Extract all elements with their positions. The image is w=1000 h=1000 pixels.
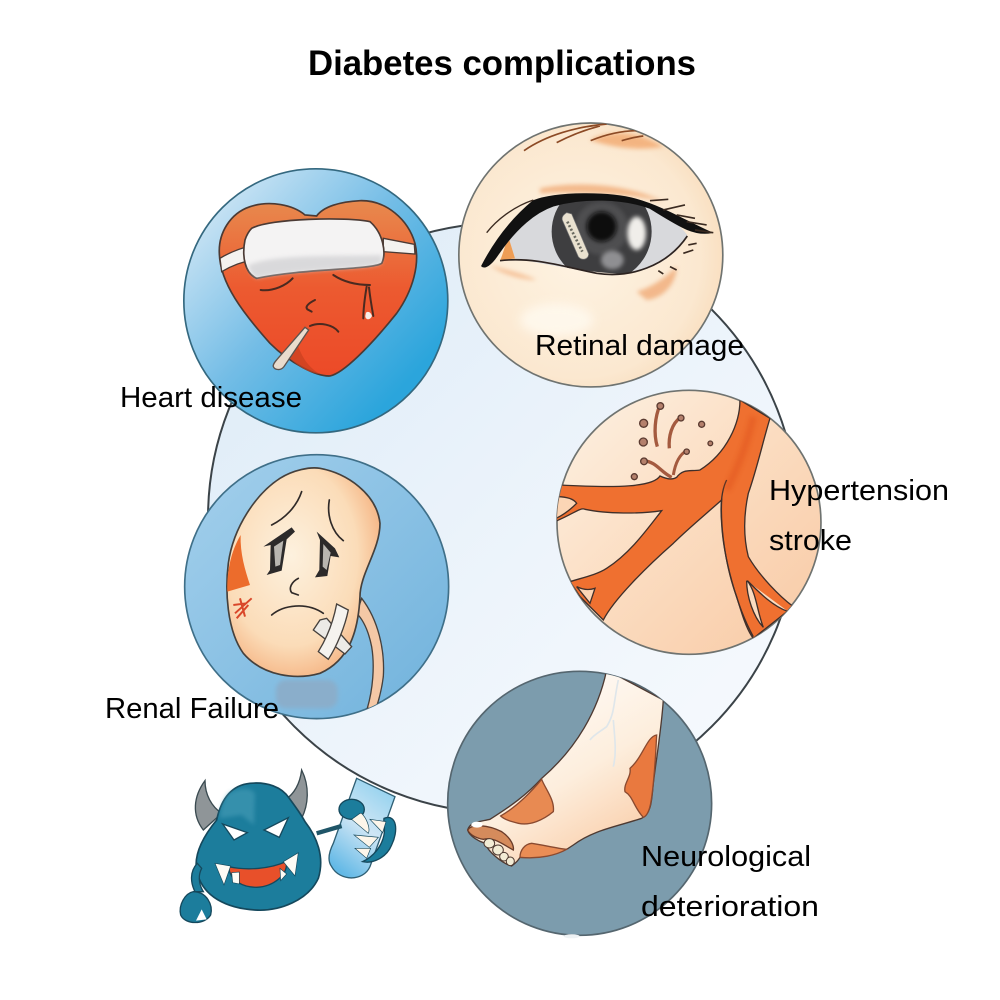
panel: hypertension stroke [550, 390, 821, 654]
icon: monster left hand [192, 863, 203, 892]
big background circle [208, 223, 798, 813]
icon: burst vessels [643, 405, 687, 477]
label: heart disease: Heart disease [120, 382, 302, 414]
icon: monster eyes [223, 824, 247, 840]
icon: toes [471, 822, 483, 828]
label: hypertension stroke [769, 475, 949, 557]
icon: heart face [261, 275, 373, 332]
icon: monster right hand [363, 817, 396, 862]
monster [180, 770, 396, 922]
title: Diabetes complications [308, 44, 696, 83]
icon: foot [468, 670, 663, 866]
label: hypertension stroke: stroke [769, 525, 852, 557]
icon: iris [552, 200, 652, 274]
icon: kidney plaster [313, 618, 352, 654]
icon: ureter [357, 598, 384, 708]
icon: kidney face [272, 492, 343, 615]
icon: test tube [329, 778, 395, 878]
panel: neurological deterioration [448, 670, 712, 938]
label: renal failure: Renal Failure [105, 693, 279, 725]
icon: monster arm [317, 826, 342, 833]
label: hypertension stroke: Hypertension [769, 475, 949, 507]
icon: eyebrow [590, 133, 663, 149]
label: retinal damage: Retinal damage [535, 330, 744, 362]
icon: horns [195, 770, 307, 830]
icon: white edge smudge [564, 934, 580, 938]
icon: cold pack [244, 219, 384, 278]
icon: foot ulcers [501, 779, 554, 824]
icon: kidney patch [227, 535, 250, 592]
icon: smudge [276, 680, 338, 708]
icon: kidney [227, 468, 380, 676]
icon: blood vessels [550, 400, 793, 638]
icon: thermometer [273, 327, 309, 370]
icon: heart [219, 201, 417, 376]
panel: retinal damage [459, 123, 723, 387]
label: neurological deterioration: Neurological [641, 841, 811, 873]
label: neurological deterioration [641, 841, 819, 923]
panel: heart disease [184, 169, 448, 433]
panel: renal failure [185, 455, 449, 719]
icon: monster mouth [228, 862, 286, 887]
label: neurological deterioration: deterioration [641, 891, 819, 923]
icon: eye white [508, 197, 687, 274]
icon: eyelids [482, 194, 712, 267]
icon: headband [220, 238, 415, 272]
icon: monster body [196, 783, 321, 910]
icon: foot veins [590, 680, 618, 767]
